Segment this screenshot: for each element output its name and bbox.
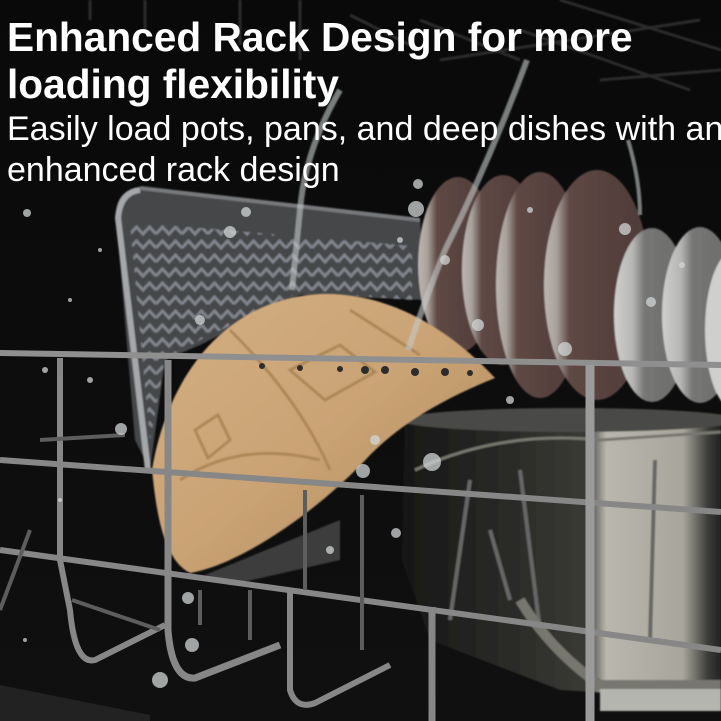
water stream [292, 60, 640, 350]
subtitle: Easily load pots, pans, and deep dishes with an [7, 110, 721, 148]
title [7, 14, 633, 107]
subtitle: enhanced rack design [7, 150, 340, 188]
subtitle [7, 110, 721, 188]
heading block [7, 14, 721, 188]
pot [400, 408, 721, 700]
title: loading flexibility [7, 61, 339, 107]
upper rack wires [90, 0, 721, 90]
baking sheet [116, 188, 425, 585]
bowl [152, 294, 495, 573]
title: Enhanced Rack Design for more [7, 14, 633, 60]
water droplets [23, 179, 685, 688]
dishwasher lower rack [0, 353, 721, 721]
plates [418, 170, 721, 410]
drips along rack [259, 363, 473, 376]
floor [0, 685, 150, 721]
